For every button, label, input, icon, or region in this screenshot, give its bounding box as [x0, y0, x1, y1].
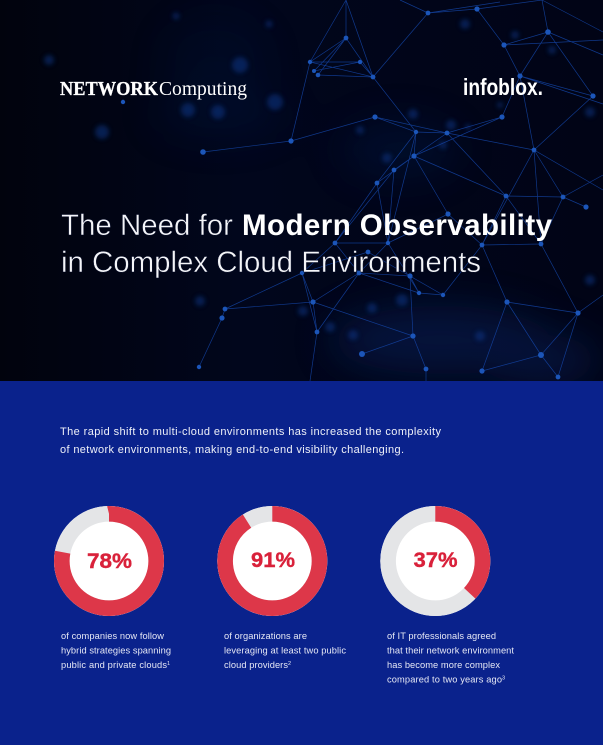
caption: 78%: of companies now follow [61, 631, 164, 641]
caption: 37%: of IT professionals agreed [387, 631, 496, 641]
caption: 37%: 3 [502, 676, 505, 682]
intro text: of network environments, making end-to-end visibility challenging. [60, 444, 404, 456]
caption: 37%: that their network environment [387, 646, 514, 656]
caption: 91%: 2 [288, 661, 291, 667]
donut chart: 37% [380, 506, 490, 616]
intro text [60, 426, 441, 456]
caption: 91%: of organizations are [224, 631, 307, 641]
donut chart: 37%: 37% [414, 548, 458, 572]
donut chart: 78%: 78% [87, 549, 132, 573]
caption: 91%: cloud providers [224, 660, 288, 670]
title: in Complex Cloud Environments [61, 246, 481, 279]
panel: hero network background [0, 0, 603, 385]
caption: 78%: 1 [167, 661, 170, 667]
caption: 91% [224, 631, 346, 670]
intro text: The rapid shift to multi-cloud environments has increased the complexity [60, 426, 441, 438]
caption: 78%: public and private clouds [61, 660, 167, 670]
donut chart: 91%: 91% [251, 548, 295, 572]
donut chart: 91% [217, 506, 327, 616]
caption: 37%: compared to two years ago [387, 674, 502, 684]
title: Modern Observability [242, 209, 553, 242]
title: The Need for [61, 209, 233, 242]
logo: Network Computing [60, 78, 247, 100]
caption: 91%: leveraging at least two public [224, 646, 346, 656]
title [61, 209, 553, 279]
logo: Network Computing: Computing [159, 78, 247, 100]
caption: 37%: has become more complex [387, 660, 500, 670]
donut chart: 78% [54, 506, 164, 616]
logo: Network Computing: NETWORK [60, 78, 158, 100]
caption: 78%: hybrid strategies spanning [61, 646, 171, 656]
logo: infoblox: infoblox. [463, 74, 543, 100]
caption: 37% [387, 631, 514, 684]
panel: statistics section [0, 381, 603, 745]
caption: 78% [61, 631, 171, 670]
